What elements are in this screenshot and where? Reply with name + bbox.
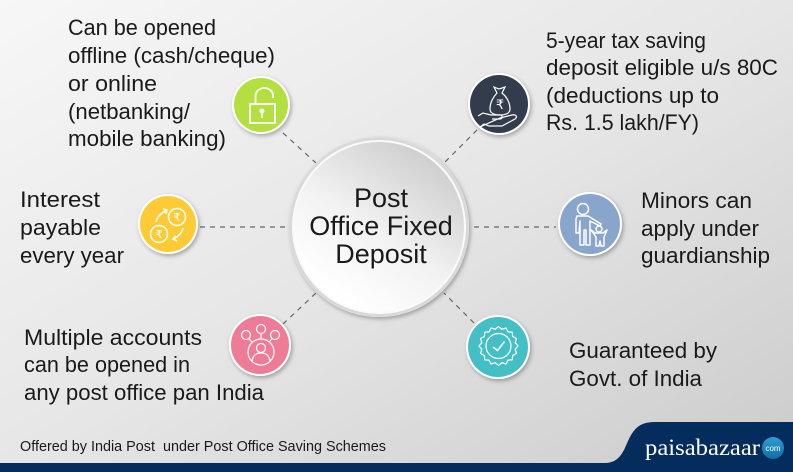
icon: rupee exchange [138,194,198,254]
text: open offline or online: or online [68,71,157,96]
icon: rupee exchange: ₹ [156,229,162,241]
text: interest payable: payable [20,215,101,240]
text: multiple accounts [24,325,265,405]
text: guaranteed: Guaranteed by [569,338,717,363]
text: tax saving: 5-year tax saving [546,28,706,53]
text: open offline or online [68,15,275,151]
text: open offline or online: mobile banking) [68,126,226,151]
text: tax saving: Rs. 1.5 lakh/FY) [546,110,699,135]
text: multiple accounts: any post office pan India [24,380,265,405]
icon: connected people [229,314,291,376]
hub title: Office Fixed [309,211,453,241]
text: tax saving: deposit eligible u/s 80C [546,55,778,80]
hub title: Post [354,183,409,213]
text: interest payable: every year [20,243,124,268]
text: guaranteed: Govt. of India [569,366,703,391]
brand name: paisabazaar [645,435,760,460]
icon: guarantee badge [466,315,530,379]
text: tax saving: (deductions up to [546,83,719,108]
icon: open padlock [232,76,290,134]
text: minors: guardianship [641,243,770,268]
text: minors [641,188,770,268]
icon: adult and child [558,192,622,256]
icon: rupee exchange: ₹ [174,212,180,224]
text: interest payable: Interest [20,187,100,212]
text: multiple accounts: Multiple accounts [24,325,202,350]
text: minors: apply under [641,216,759,241]
text: minors: Minors can [641,188,752,213]
central hub [289,137,469,317]
text: open offline or online: offline (cash/cheque) [68,43,275,68]
dashed connectors [200,130,556,324]
hub title: Deposit [335,239,427,269]
brand dot: com [765,444,781,453]
text: multiple accounts: can be opened in [24,352,190,377]
text: open offline or online: Can be opened [68,15,216,40]
footnote: Offered by India Post under Post Office Saving Schemes [20,439,386,455]
brand dot [762,437,784,459]
text: open offline or online: (netbanking/ [68,99,191,124]
text: interest payable [20,187,124,268]
text: guaranteed [569,338,717,391]
icon: money bag on hand [468,73,530,135]
text: tax saving [546,28,778,135]
icon: money bag on hand: ₹ [496,98,504,113]
footer brand band [0,422,793,472]
